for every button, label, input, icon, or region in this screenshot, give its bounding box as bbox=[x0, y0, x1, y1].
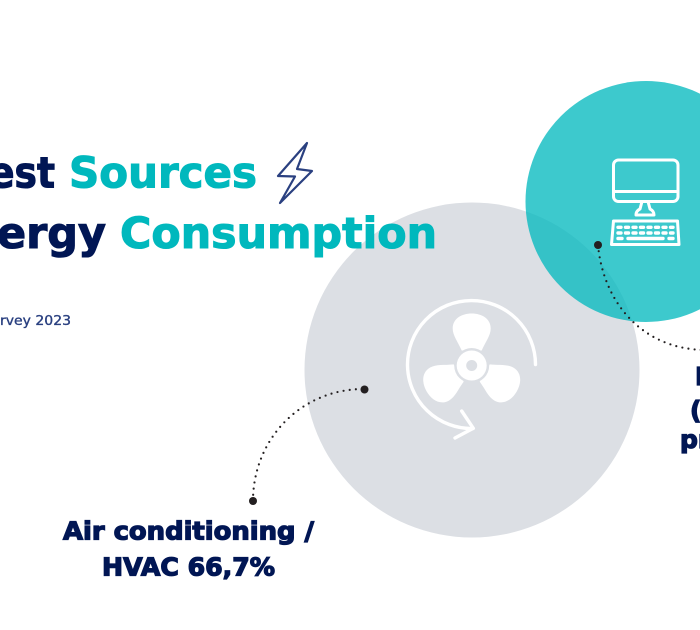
callout line: computers bbox=[594, 241, 700, 350]
title bbox=[0, 148, 437, 259]
keyboard bbox=[612, 221, 679, 244]
label line 1: Air conditioning / bbox=[63, 516, 315, 546]
icon: lightning bolt bbox=[278, 143, 312, 203]
keyboard keys bbox=[618, 227, 673, 238]
circle: computers bbox=[526, 81, 700, 322]
title line 2 dark part: ergy bbox=[0, 209, 106, 259]
fan rotation arrow bbox=[408, 301, 536, 438]
subtitle: rvey 2023 bbox=[0, 313, 71, 329]
monitor stand bbox=[636, 202, 654, 215]
callout line: air conditioning bbox=[249, 386, 368, 505]
title line 2 teal part: Consumption bbox=[120, 209, 437, 259]
monitor bbox=[614, 160, 678, 202]
title line 1 teal part: Sources bbox=[69, 148, 257, 198]
circle: air conditioning bbox=[304, 202, 640, 538]
label: air conditioning bbox=[63, 516, 315, 582]
fan blades bbox=[417, 314, 526, 408]
label line 2: HVAC 66,7% bbox=[102, 552, 275, 582]
icon: computer bbox=[612, 160, 679, 244]
label: computers (clipped) bbox=[680, 362, 700, 454]
icon: fan bbox=[408, 301, 536, 438]
